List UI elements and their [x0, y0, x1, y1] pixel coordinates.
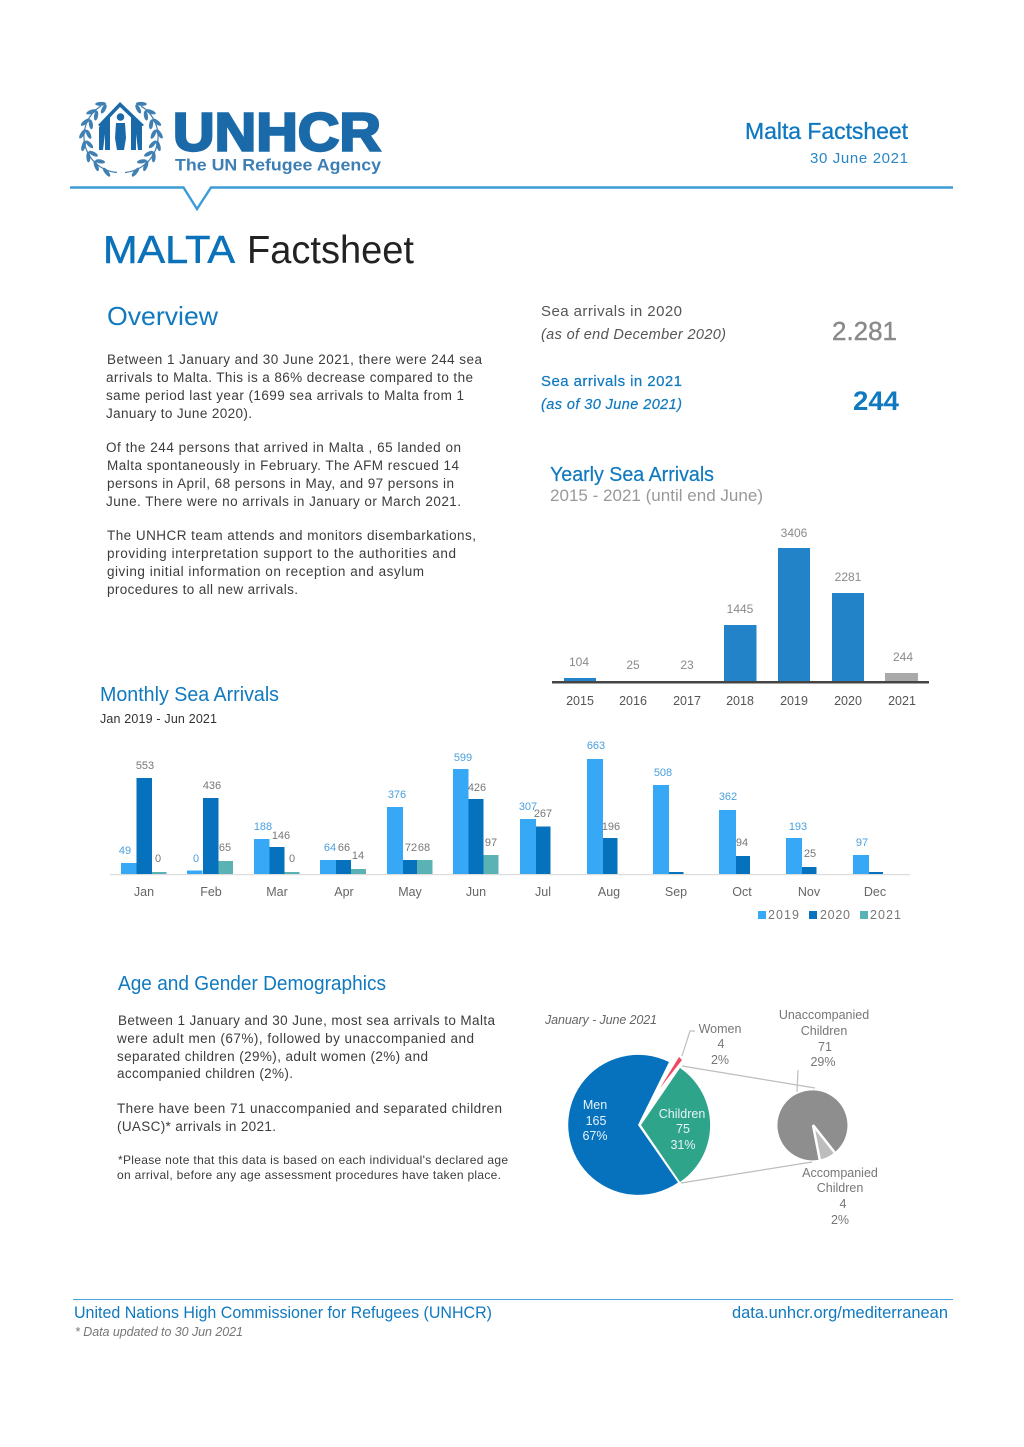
month axis labels: Jul	[535, 885, 551, 899]
data labels 2020 and 2021: 97	[485, 837, 497, 849]
month axis labels: Jan	[134, 885, 154, 899]
heading: overview: Overview	[107, 301, 218, 331]
bar chart: yearly arrivals: 2019	[780, 694, 808, 708]
data labels 2019: 188	[254, 821, 272, 833]
pie label: women: Women	[699, 1022, 741, 1036]
pie labels: men and children: 75	[676, 1122, 690, 1136]
detail label: accompanied children: 4	[840, 1197, 847, 1211]
data labels 2019: 97	[856, 837, 868, 849]
text block: demographics paragraph 1: separated children (29%), adult women (2%) and	[117, 1049, 428, 1064]
month axis labels: Sep	[665, 885, 687, 899]
footer organisation name: United Nations High Commissioner for Refugees (UNHCR)	[74, 1304, 492, 1322]
heading: yearly sea arrivals: Yearly Sea Arrivals	[550, 464, 714, 486]
detail label: unaccompanied children	[779, 1008, 869, 1069]
connector lines	[681, 1031, 815, 1183]
text block: footnote: *Please note that this data is based on each individual's declared age	[118, 1153, 508, 1167]
data labels 2020 and 2021: 267	[534, 808, 552, 820]
detail label: accompanied children	[802, 1166, 878, 1227]
detail label: unaccompanied children: Unaccompanied	[779, 1008, 869, 1022]
bar chart: yearly arrivals: 3406	[781, 526, 808, 540]
data labels 2020 and 2021: 0	[289, 853, 295, 865]
data labels 2020 and 2021: 25	[804, 848, 816, 860]
detail label: unaccompanied children: 29%	[810, 1055, 836, 1069]
data labels 2020 and 2021: 66	[338, 842, 350, 854]
bar chart: monthly arrivals	[110, 740, 910, 922]
heading: demographics: Age and Gender Demographics	[118, 973, 386, 995]
footer note: * Data updated to 30 Jun 2021	[75, 1325, 243, 1339]
detail label: unaccompanied children: Children	[801, 1024, 847, 1038]
data labels 2019: 0	[193, 853, 199, 865]
header document title: Malta Factsheet	[745, 118, 909, 144]
detail label: accompanied children: Accompanied	[802, 1166, 878, 1180]
text block: overview paragraph 2: persons in April, 68 persons in May, and 97 persons in	[107, 476, 454, 491]
data labels 2019: 193	[789, 821, 807, 833]
data labels 2020 and 2021: 553	[136, 760, 154, 772]
bar chart: yearly arrivals: 2021	[888, 694, 916, 708]
pie slice: men	[568, 1055, 678, 1195]
bar chart: yearly arrivals: 104	[569, 655, 589, 669]
text block: overview paragraph 1: January to June 2020).	[106, 406, 252, 421]
data labels 2020 and 2021: 426	[468, 782, 486, 794]
footer	[73, 1299, 953, 1339]
text block: overview paragraph 2: Malta spontaneously in February. The AFM rescued 14	[107, 458, 459, 473]
month axis labels: Feb	[200, 885, 222, 899]
panel: sea arrivals 2020 stat: (as of end December 2020)	[541, 327, 726, 343]
text block: demographics paragraph 1	[116, 1013, 495, 1081]
data labels 2019: 508	[654, 767, 672, 779]
text block: overview paragraph 1	[106, 352, 482, 421]
panel: overview	[106, 301, 482, 597]
pie labels: men and children: 165	[586, 1114, 606, 1128]
text block: overview paragraph 2: Of the 244 persons that arrived in Malta , 65 landed on	[106, 440, 461, 455]
bar chart: yearly arrivals: 1445	[727, 602, 754, 616]
data labels 2019: 599	[454, 752, 472, 764]
text block: demographics paragraph 1: accompanied children (2%).	[117, 1066, 293, 1081]
pie chart: age and gender	[544, 1008, 878, 1227]
text block: overview paragraph 3: procedures to all new arrivals.	[107, 582, 298, 597]
month axis labels: Jun	[466, 885, 486, 899]
bar chart: yearly arrivals: 2016	[619, 694, 647, 708]
data labels 2020 and 2021: 436	[203, 780, 221, 792]
data labels 2020 and 2021: 196	[602, 821, 620, 833]
pie labels: men and children: Children	[659, 1107, 705, 1121]
data labels 2020 and 2021: 14	[352, 850, 364, 862]
pie label: women	[699, 1022, 741, 1067]
month axis labels: Apr	[334, 885, 354, 899]
data labels 2020 and 2021	[136, 760, 816, 865]
text block: overview paragraph 1: arrivals to Malta. This is a 86% decrease compared to the	[106, 370, 473, 385]
text block: overview paragraph 3: The UNHCR team attends and monitors disembarkations,	[107, 528, 476, 543]
text block: overview paragraph 1: Between 1 January and 30 June 2021, there were 244 sea	[107, 352, 482, 367]
legend	[758, 908, 901, 922]
data labels 2020 and 2021: 94	[736, 837, 748, 849]
data labels 2019: 362	[719, 791, 737, 803]
bar chart: yearly arrivals: 2017	[673, 694, 701, 708]
bar chart: yearly arrivals: 2020	[834, 694, 862, 708]
data labels 2020 and 2021: 0	[155, 853, 161, 865]
pie slice: women	[660, 1057, 682, 1088]
text block: demographics paragraph 2: (UASC)* arrivals in 2021.	[117, 1119, 276, 1134]
text block: footnote	[117, 1153, 508, 1182]
footer link: data.unhcr.org/mediterranean	[732, 1304, 948, 1322]
emblem wreath	[78, 102, 164, 178]
pie label: women: 4	[718, 1037, 725, 1051]
data labels 2020 and 2021: 68	[418, 842, 430, 854]
data labels 2019: 663	[587, 740, 605, 752]
header document title	[745, 118, 909, 167]
icon: UNHCR emblem	[78, 102, 164, 178]
data labels 2019	[119, 740, 868, 865]
emblem sheltering hands and figure	[98, 102, 144, 150]
subheading: yearly period: 2015 - 2021 (until end June)	[550, 487, 763, 505]
month axis labels: Oct	[732, 885, 752, 899]
detail label: unaccompanied children: 71	[818, 1040, 832, 1054]
bar chart: yearly arrivals: 2018	[726, 694, 754, 708]
bars 2021	[152, 855, 498, 874]
bar chart: yearly arrivals: 244	[893, 650, 913, 664]
panel: sea arrivals 2021 stat: Sea arrivals in 2021	[541, 373, 682, 390]
pie label: women: 2%	[711, 1053, 729, 1067]
data labels 2019: 64	[324, 842, 336, 854]
panel: sea arrivals 2020 stat: 2.281	[832, 316, 897, 346]
panel: sea arrivals 2021 stat	[541, 373, 899, 416]
bar chart: yearly arrivals: 2015	[566, 694, 594, 708]
pie labels: men and children: 31%	[670, 1138, 696, 1152]
text block: demographics paragraph 1: were adult men (67%), followed by unaccompanied and	[116, 1031, 474, 1046]
text block: demographics paragraph 2: There have been 71 unaccompanied and separated children	[117, 1101, 502, 1116]
panel: yearly sea arrivals	[550, 464, 929, 708]
panel: sea arrivals 2021 stat: (as of 30 June 2021)	[541, 397, 682, 413]
pie labels: men and children	[582, 1098, 705, 1152]
logo tagline: The UN Refugee Agency	[175, 156, 382, 174]
chart period label: January - June 2021	[544, 1013, 657, 1027]
logo wordmark: UNHCR	[173, 102, 381, 162]
text block: demographics paragraph 1: Between 1 January and 30 June, most sea arrivals to Malta	[118, 1013, 495, 1028]
detail label: accompanied children: 2%	[831, 1213, 849, 1227]
bar chart: yearly arrivals	[552, 526, 929, 708]
data labels 2019: 307	[519, 801, 537, 813]
text block: overview paragraph 2: June. There were no arrivals in January or March 2021.	[106, 494, 461, 509]
detail label: accompanied children: Children	[817, 1181, 863, 1195]
legend: 2020	[820, 908, 850, 922]
month axis labels: Nov	[798, 885, 821, 899]
text block: overview paragraph 3	[107, 528, 476, 597]
title: MALTA	[103, 229, 235, 272]
data labels 2019: 49	[119, 845, 131, 857]
UNHCR logo	[78, 102, 382, 178]
month axis labels: Aug	[598, 885, 620, 899]
data labels 2020 and 2021: 146	[272, 830, 290, 842]
header document title: 30 June 2021	[810, 150, 908, 167]
data labels 2020 and 2021: 72	[405, 842, 417, 854]
bars 2020	[136, 778, 883, 874]
bars 2019	[121, 759, 869, 874]
month axis labels: Dec	[864, 885, 886, 899]
text block: overview paragraph 2	[106, 440, 461, 509]
text block: overview paragraph 1: same period last year (1699 sea arrivals to Malta from 1	[106, 388, 464, 403]
pie labels: men and children: Men	[583, 1098, 607, 1112]
panel: sea arrivals 2020 stat	[541, 303, 897, 346]
header rule with notch	[70, 188, 953, 209]
panel: sea arrivals 2021 stat: 244	[853, 386, 899, 416]
text block: overview paragraph 3: providing interpretation support to the authorities and	[107, 546, 456, 561]
detail pie: children breakdown	[777, 1090, 847, 1161]
legend: 2019	[768, 908, 799, 922]
data labels 2020 and 2021: 65	[219, 842, 231, 854]
heading: monthly sea arrivals: Monthly Sea Arrivals	[100, 684, 279, 706]
panel: sea arrivals 2020 stat: Sea arrivals in 2020	[541, 303, 682, 320]
panel: age and gender demographics	[116, 973, 878, 1227]
month axis labels: May	[398, 885, 423, 899]
text block: demographics paragraph 2	[117, 1101, 502, 1134]
bar chart: yearly arrivals: 2281	[835, 570, 862, 584]
legend: 2021	[870, 908, 901, 922]
title	[103, 229, 414, 272]
pie slice: children	[641, 1068, 710, 1182]
bar chart: yearly arrivals: 25	[626, 658, 640, 672]
pie labels: men and children: 67%	[582, 1129, 608, 1143]
text block: footnote: on arrival, before any age assessment procedures have taken place.	[117, 1168, 501, 1182]
title: Factsheet	[247, 229, 414, 272]
panel: monthly sea arrivals	[100, 684, 910, 922]
month axis labels: Mar	[266, 885, 288, 899]
month axis labels	[134, 885, 886, 899]
text block: overview paragraph 3: giving initial information on reception and asylum	[107, 564, 424, 579]
subheading: monthly period: Jan 2019 - Jun 2021	[100, 712, 217, 726]
bar chart: yearly arrivals: 23	[680, 658, 694, 672]
data labels 2019: 376	[388, 789, 406, 801]
